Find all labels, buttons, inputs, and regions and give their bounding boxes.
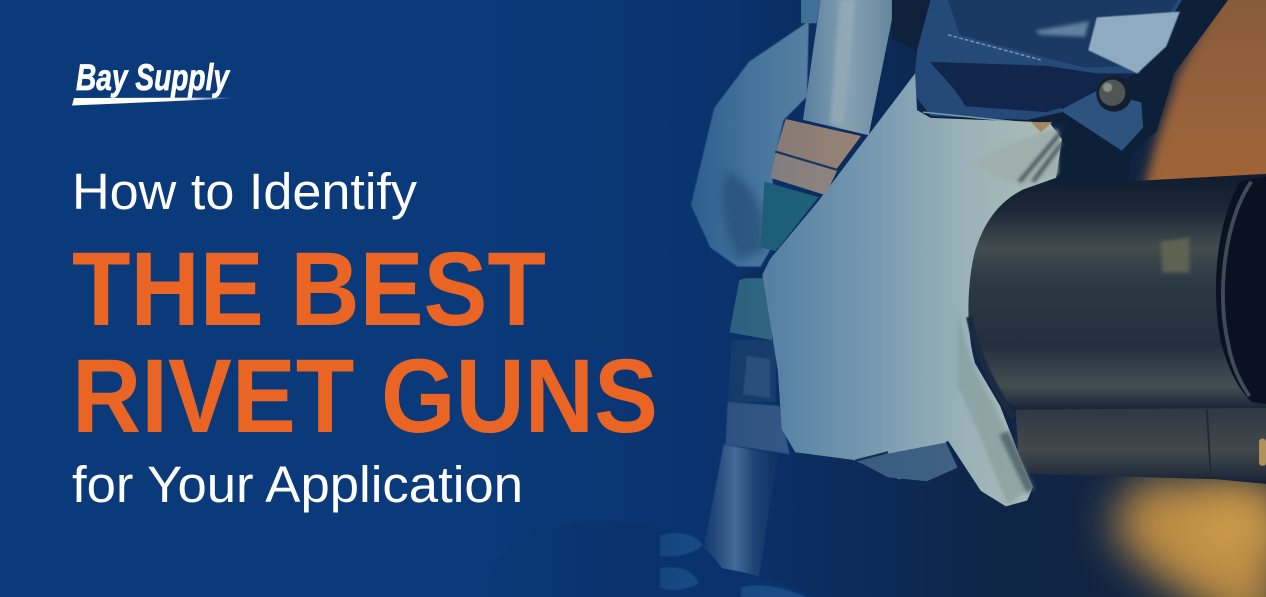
title line 3: RIVET GUNS <box>72 338 658 455</box>
logo: Bay Supply: Bay Supply <box>76 57 231 98</box>
front glove <box>762 73 1062 506</box>
shadow between tool and glove <box>733 247 778 278</box>
title line 2: THE BEST <box>72 231 546 348</box>
tool collar <box>770 119 861 195</box>
left fade overlay <box>480 0 960 597</box>
denim cuff <box>913 0 1182 151</box>
back glove <box>691 21 809 267</box>
lower rod <box>701 340 789 597</box>
tool tube <box>801 0 896 135</box>
photo: hands holding rivet gun <box>490 0 1266 597</box>
riveted workpiece <box>490 521 830 597</box>
barrel <box>969 174 1266 485</box>
background glow: orange <box>1112 0 1266 597</box>
jacket dark collar <box>892 0 1228 189</box>
tool teal body <box>760 182 818 251</box>
title line 4: for Your Application <box>72 456 523 513</box>
title line 1: How to Identify <box>72 163 418 220</box>
logo: Bay Supply <box>72 57 233 106</box>
